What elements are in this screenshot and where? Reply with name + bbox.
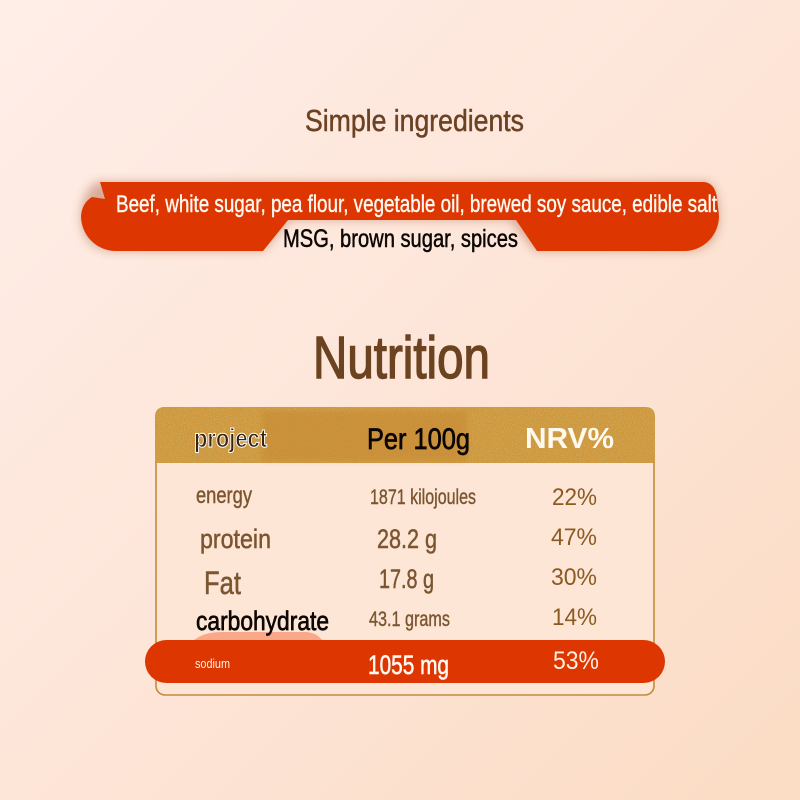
row: energy: 22% bbox=[552, 484, 597, 511]
row: fat: 17.8 g bbox=[379, 564, 434, 594]
row: energy: energy bbox=[196, 482, 252, 508]
row: carbohydrate bbox=[190, 604, 597, 644]
row: sodium highlight: 1055 mg bbox=[368, 650, 449, 680]
row: fat: 30% bbox=[551, 564, 597, 591]
row: carbohydrate: 43.1 grams bbox=[369, 608, 450, 631]
heading: simple ingredients: Simple ingredients bbox=[305, 103, 524, 138]
row: protein: 28.2 g bbox=[377, 524, 437, 554]
header: NRV%: NRV% bbox=[525, 423, 614, 455]
table header band bbox=[155, 407, 655, 463]
text: ingredients line two: MSG, brown sugar, spices bbox=[283, 225, 518, 253]
row: sodium highlight bbox=[145, 640, 665, 683]
row: protein: protein bbox=[200, 524, 271, 554]
row: energy bbox=[196, 482, 597, 511]
row: fat bbox=[204, 564, 597, 601]
header: per 100g: Per 100g bbox=[367, 423, 470, 456]
row: carbohydrate: 14% bbox=[552, 604, 597, 631]
table frame bbox=[156, 408, 654, 695]
heading: nutrition: Nutrition bbox=[313, 325, 490, 391]
row: protein bbox=[200, 524, 597, 554]
panel: ingredients banner bbox=[81, 182, 719, 253]
header: project: project bbox=[194, 423, 267, 453]
panel: nutrition table bbox=[145, 407, 665, 695]
row: sodium highlight: 53% bbox=[553, 647, 599, 675]
row: fat: Fat bbox=[204, 565, 241, 601]
row: energy: 1871 kilojoules bbox=[370, 486, 476, 509]
row: sodium highlight: sodium bbox=[195, 656, 230, 671]
row: protein: 47% bbox=[551, 524, 597, 551]
row: carbohydrate: carbohydrate bbox=[196, 606, 329, 636]
